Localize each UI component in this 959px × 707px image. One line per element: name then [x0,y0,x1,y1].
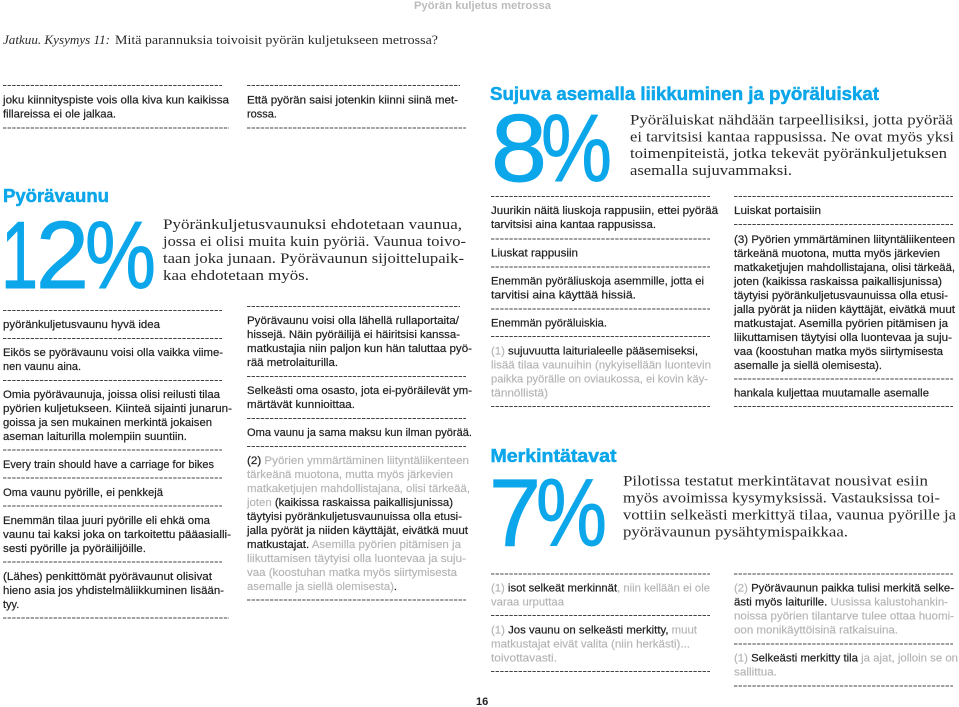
comments column: pyöräluiskat right: liikuttamisen täytyisi olla luontevaa ja suju- [734,332,952,344]
comments column: Pyörävaunu right: tärkeänä muotona, mutta myös järkevien [247,469,453,481]
statistic: 7% [489,460,607,566]
question heading: Mitä parannuksia toivoisit pyörän kuljetukseen metrossa? [115,32,438,47]
top middle comment: Että pyörän saisi jotenkin kiinni siinä met- [247,94,458,106]
statistic: 12%: 1 [1,202,38,309]
comments column: merkintätavat right [734,574,958,686]
comments column: Pyörävaunu left: Oma vaunu pyörille, ei penkkejä [3,487,164,499]
top middle comment [247,86,466,128]
question heading [3,32,438,47]
comments column: merkintätavat right: (1) Selkeästi merkitty tila ja ajat, jolloin se on [734,652,958,664]
summary paragraph: Pyörävaunu [162,217,466,284]
comments column: merkintätavat left: varaa urputtaa [491,596,565,608]
comments column: merkintätavat right: noissa pyörien tilantarve tulee ottaa huomi- [734,610,954,622]
summary paragraph: merkintätavat: Pilotissa testatut merkintätavat nousivat esiin [623,474,929,490]
comments column: merkintätavat right: oon monikäyttöisinä ratkaisuina. [734,624,898,636]
comments column: Pyörävaunu left: tyy. [3,599,19,611]
comments column: Pyörävaunu left: Eikös se pyörävaunu voisi olla vaikka viime- [3,347,223,359]
comments column: pyöräluiskat left: lisää tilaa vaunuihin (nykyisellään luontevin [491,360,711,372]
statistic: 12%: % [85,202,156,309]
comments column: Pyörävaunu left: pyörien kuljetukseen. Kiinteä sijainti junarun- [3,403,232,415]
heading: Merkintätavat: Merkintätavat [490,446,617,466]
comments column: Pyörävaunu left: hieno asia jos yhdistelmäliikkuminen lisään- [3,585,224,597]
statistic: 8%: % [541,95,612,202]
summary paragraph: pyöräluiskat: ei tarvitsisi kantaa rappusissa. Ne ovat myös yksi [630,130,954,146]
comments column: Pyörävaunu left: aseman laiturilla molempiin suuntiin. [3,431,187,443]
comments column: pyöräluiskat right: hankala kuljettaa muutamalle asemalle [734,388,929,400]
comments column: Pyörävaunu left: Omia pyörävaunuja, joissa olisi reilusti tilaa [3,389,221,401]
comments column: Pyörävaunu left: Enemmän tilaa juuri pyörille eli ehkä oma [3,515,211,527]
comments column: pyöräluiskat right: (3) Pyörien ymmärtäminen liityntäliikenteen [734,234,955,246]
comments column: pyöräluiskat right: vaa (koostuhan matka myös siirtymisesta [734,346,944,358]
comments column: merkintätavat left [491,574,710,672]
comments column: Pyörävaunu right: rää metrolaiturilla. [247,357,338,369]
comments column: Pyörävaunu right: täytyisi pyöränkuljetusvaunuissa olla etusi- [247,511,462,523]
comments column: Pyörävaunu right: hissejä. Näin pyöräilijä ei häiritsisi kanssa- [247,329,460,341]
summary paragraph: merkintätavat: vottiin selkeästi merkittyä tilaa, vaunua pyörille ja [623,508,956,524]
comments column: merkintätavat right: sallittua. [734,666,777,678]
comments column: Pyörävaunu right: matkustajia niin paljon kun hän taluttaa pyö- [247,343,472,355]
summary paragraph: Pyörävaunu: taan joka junaan. Pyörävaunun sijoittelupaik- [163,251,464,267]
comments column: pyöräluiskat right: tärkeänä muotona, mutta myös järkevien [734,248,940,260]
comments column: Pyörävaunu right: matkustajat. Asemilla pyörien pitämisen ja [247,539,462,551]
comments column: merkintätavat left: (1) Jos vaunu on selkeästi merkitty, muut [491,624,697,636]
summary paragraph: pyöräluiskat: toimenpiteistä, jotka tekevät pyöränkuljetuksen [630,146,948,162]
comments column: Pyörävaunu right: Pyörävaunu voisi olla lähellä rullaportaita/ [247,315,460,327]
section: Sujuva asemalla liikkuminen ja pyöräluiskat [490,84,954,202]
comments column: Pyörävaunu right: vaa (koostuhan matka myös siirtymisesta [247,567,458,579]
comments column: pyöräluiskat right: Luiskat portaisiin [734,205,821,217]
comments column: pyöräluiskat right [733,196,955,406]
comments column: pyöräluiskat right: matkaketjujen mahdollistajana, olisi tärkeää, [734,262,955,274]
summary paragraph: pyöräluiskat: Pyöräluiskat nähdään tarpeellisiksi, jotta pyörää [630,112,953,128]
comments column: Pyörävaunu right: jalla pyörät ja niiden käyttäjät, eivätkä muut [246,525,468,537]
summary paragraph: Pyörävaunu: jossa ei olisi muita kuin pyöriä. Vaunua toivo- [162,234,466,250]
comments column: merkintätavat left: matkustajat eivät valita (niin herkästi)... [491,638,690,650]
comments column: Pyörävaunu right: Selkeästi oma osasto, jota ei-pyöräilevät ym- [247,385,472,397]
statistic: 12% [1,202,156,309]
heading: Pyörävaunu: Pyörävaunu [3,186,109,206]
comments column: pyöräluiskat right: täytyisi pyöränkuljetusvaunuissa olla etusi- [734,290,948,302]
section: Pyörävaunu [1,186,466,309]
statistic: 8%: 8 [491,95,547,202]
comments column: Pyörävaunu left [3,310,232,618]
comments column: Pyörävaunu left: Every train should have a carriage for bikes [3,459,214,471]
comments column: pyöräluiskat left: Enemmän pyöräliuskoja asemmille, jotta ei [491,276,704,288]
comments column: pyöräluiskat left: tarvitsisi aina kantaa rappusissa. [491,219,656,231]
heading: Sujuva asemalla liikkuminen: Sujuva asemalla liikkuminen ja pyöräluiskat [490,84,879,104]
comments column: Pyörävaunu right: asemalle ja siellä olemisesta) . [247,581,397,593]
comments column: merkintätavat left: (1) isot selkeät merkinnät , niin kellään ei ole [491,582,710,594]
comments column: pyöräluiskat left: Liuskat rappusiin [491,248,578,260]
top left comment [2,86,230,128]
comments column: pyöräluiskat left: tarvitisi aina käyttää hissiä. [491,290,636,302]
comments column: pyöräluiskat right: matkustajat. Asemilla pyörien pitämisen ja [734,318,949,330]
page header: Pyörän kuljetus metrossa [414,0,552,12]
comments column: pyöräluiskat right: joten (kaikissa raskaissa paikallisjunissa) [733,276,942,288]
summary paragraph: pyöräluiskat: asemalla sujuvammaksi. [630,163,792,179]
comments column: Pyörävaunu left: sesti pyörille ja pyöräilijöille. [3,543,146,555]
comments column: Pyörävaunu right: Oma vaunu ja sama maksu kun ilman pyörää. [247,427,472,439]
comments column: Pyörävaunu right: märtävät kunnioittaa. [247,399,355,411]
comments column: Pyörävaunu right [246,306,472,600]
comments column: Pyörävaunu left: nen vaunu aina. [3,361,81,373]
statistic: 8% [491,95,612,202]
comments column: Pyörävaunu left: pyöränkuljetusvaunu hyvä idea [3,319,161,331]
summary paragraph: Pyörävaunu: kaa ehdotetaan myös. [163,268,309,284]
summary paragraph: merkintätavat: pyörävaunun pysähtymispaikkaa. [623,524,848,540]
comments column: Pyörävaunu right: joten (kaikissa raskaissa paikallisjunissa) [246,497,453,509]
top left comment: joku kiinnityspiste vois olla kiva kun kaikissa [2,94,230,106]
section: Merkintätavat [489,446,956,566]
summary paragraph: Pyörävaunu: Pyöränkuljetusvaunuksi ehdotetaan vaunua, [163,217,462,233]
comments column: Pyörävaunu left: (Lähes) penkittömät pyörävaunut olisivat [3,571,212,583]
comments column: pyöräluiskat left [491,196,719,406]
statistic: 7%: 7 [489,460,541,566]
comments column: pyöräluiskat left: Enemmän pyöräluiskia. [491,318,607,330]
comments column: pyöräluiskat right: jalla pyörät ja niiden käyttäjät, eivätkä muut [733,304,955,316]
comments column: Pyörävaunu right: matkaketjujen mahdollistajana, olisi tärkeää, [247,483,470,495]
comments column: Pyörävaunu right: (2) Pyörien ymmärtäminen liityntäliikenteen [247,455,469,467]
summary paragraph: merkintätavat [623,474,956,540]
comments column: merkintätavat right: ästi myös laiturille. Uusissa kalustohankin- [734,596,948,608]
comments column: pyöräluiskat left: tännöllistä) [491,388,548,400]
statistic: 7%: % [536,460,607,566]
comments column: Pyörävaunu left: vaunu tai kaksi joka on tarkoitettu pääasialli- [3,529,231,541]
comments column: merkintätavat right: (2) Pyörävaunun paikka tulisi merkitä selke- [734,582,954,594]
statistic: 12%: 2 [36,202,89,309]
question heading: Jatkuu. Kysymys 11: [3,32,110,47]
comments column: pyöräluiskat right: asemalle ja siellä olemisesta). [734,360,882,372]
comments column: Pyörävaunu right: liikuttamisen täytyisi olla luontevaa ja suju- [247,553,466,565]
comments column: merkintätavat left: toivottavasti. [491,652,557,664]
comments column: pyöräluiskat left: Juurikin näitä liuskoja rappusiin, ettei pyörää [491,205,719,217]
comments column: pyöräluiskat left: (1) sujuvuutta laiturialeelle pääsemiseksi, [491,346,698,358]
comments column: Pyörävaunu left: goissa ja sen mukainen merkintä jokaisen [3,417,212,429]
comments column: pyöräluiskat left: paikka pyörälle on oviaukossa, ei kovin käy- [491,374,708,386]
top left comment: fillareissa ei ole jalkaa. [3,108,116,120]
top middle comment: rossa. [247,108,277,120]
summary paragraph: merkintätavat: myös avoimissa kysymyksissä. Vastauksissa toi- [623,490,940,506]
summary paragraph: pyöräluiskat [630,112,954,179]
